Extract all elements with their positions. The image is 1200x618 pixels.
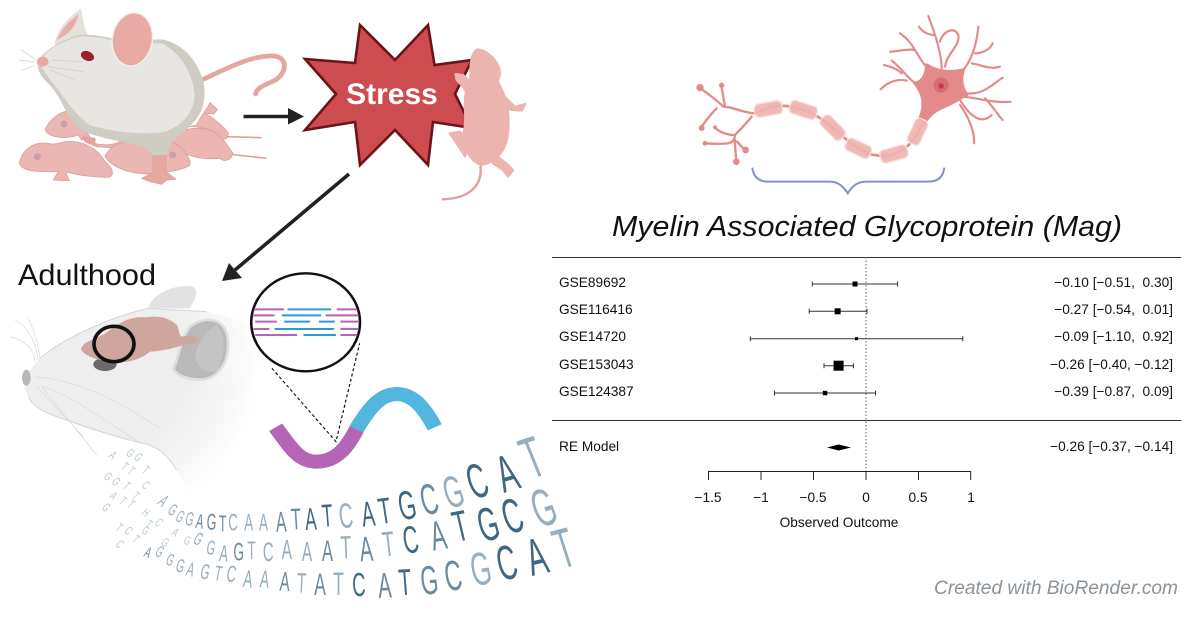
sequence row 3: C [441,552,465,601]
sequence row 3: G [466,543,496,597]
effect size squares [823,282,858,395]
sequence row 3: G [164,550,177,570]
sequence row 3: T [212,561,225,586]
study labels: GSE153043 [559,357,634,372]
sequence row 2: C [400,518,422,562]
pup limbs [450,74,525,177]
effect values: −0.09 [−1.10, 0.92] [1054,329,1173,344]
sequence row 3: A [519,526,554,587]
axis title: Observed Outcome [780,515,898,530]
sequence row 2: G [190,530,206,550]
scattered letters: A [106,450,119,462]
credit: Created with BioRender.com [934,578,1178,599]
sequence row 1: C [415,475,443,525]
scattered letters: C [152,517,165,530]
x axis [708,472,971,480]
scattered letters: T [112,522,125,535]
sequence row 1: G [183,509,196,531]
axis tick labels: −1 [753,490,769,505]
scattered letters [99,447,192,552]
sequence row 2: C [495,488,530,545]
sequence row 2: A [302,536,313,567]
sequence row 1: A [244,510,253,537]
effect values: −0.26 [−0.37, −0.14] [1050,439,1173,454]
scattered letters: T [129,534,142,547]
scattered letters: T [124,465,137,478]
scattered letters: T [129,490,142,503]
sequence row 2: A [218,540,230,567]
sequence row 2 [190,477,565,570]
terminal bulbs [696,83,749,165]
sequence row 1: T [290,503,302,537]
forest plot [552,257,1181,530]
curved sequence letters [99,425,583,607]
sequence row 3: T [296,568,307,599]
sequence row 2: T [340,531,352,566]
left ear [54,8,88,45]
scattered letters: T [118,461,131,474]
nucleus [933,77,949,93]
study labels: RE Model [559,439,619,454]
sequence row 3: A [377,567,393,607]
sequence row 3: T [333,568,344,602]
study labels: GSE124387 [559,384,634,399]
sequence row 3: G [152,542,167,561]
study labels: GSE14720 [559,329,626,344]
scattered letters: G [123,447,136,461]
pup body [463,49,509,165]
scattered letters: G [100,471,114,484]
sequence row 2: A [282,535,293,565]
reads [250,309,363,335]
region circle [94,326,134,362]
axis tick labels: −0.5 [799,490,827,505]
body highlight [40,36,195,133]
scattered letters: C [138,479,152,493]
sequence row 3 [141,516,583,607]
starburst: stress [305,25,472,165]
whiskers [10,317,160,455]
effect values [1050,275,1173,454]
sequence row 2: G [471,497,505,553]
sequence row 2: T [448,502,473,552]
scattered letters: H [138,507,152,520]
sequence row 3: G [173,556,187,578]
sequence row 1: G [437,465,470,518]
sequence row 1 [153,425,554,538]
RNA ribbon [276,394,435,462]
sequence row 2: A [322,535,334,568]
dendrites and soma [881,16,1011,143]
sequence row 2: C [263,536,274,567]
effect values: −0.27 [−0.54, 0.01] [1054,302,1173,317]
axis tick labels: 0.5 [908,490,928,505]
rear ear [173,320,228,379]
sequence row 1: A [359,495,377,535]
sequence row 2: T [247,538,256,565]
effect values: −0.26 [−0.40, −0.12] [1050,357,1173,372]
sequence row 1: G [206,508,217,535]
inner ear fold [195,325,224,372]
nose [22,370,31,386]
eye [79,49,96,63]
table rules [552,258,1181,420]
axis tick labels [694,490,975,505]
sequence row 1: A [153,492,172,511]
nucleolus [938,83,944,89]
sequence row 3: A [242,566,254,594]
sequence row 1: A [194,510,206,534]
scattered letters: G [158,536,171,550]
sequence row 1: C [459,453,495,510]
study labels [559,275,634,454]
sequence row 3: T [397,563,413,604]
sequence row 1: T [219,510,227,536]
lens circle [251,273,360,371]
sequence row 2: A [427,513,451,560]
summary diamond [827,444,851,450]
illustration: mother mouse with pups [19,8,284,184]
scattered letters: C [121,525,135,538]
effect values: −0.10 [−0.51, 0.30] [1054,275,1173,290]
sequence row 1: A [488,443,526,503]
scattered letters: T [139,464,152,477]
sequence row 1: T [376,491,394,533]
head outline [28,308,207,470]
scattered letters: G [109,476,122,489]
label: stress: Stress [346,78,438,111]
scattered letters: G [99,502,112,515]
brain [81,317,200,362]
sequence row 2: G [205,537,217,560]
scattered letters: T [119,480,133,493]
pup tail [443,167,481,199]
sequence row 1: T [511,425,554,492]
sequence row 1: C [337,496,355,537]
sequence row 1: A [304,502,318,538]
head silhouette [23,308,283,493]
right ear [109,10,156,68]
scattered letters: G [181,535,192,549]
whiskers [19,49,83,80]
effect values: −0.39 [−0.87, 0.09] [1054,384,1173,399]
scattered letters: G [139,525,151,539]
sequence row 1: C [228,510,238,537]
sequence row 2: T [380,525,397,565]
scattered letters: T [142,519,155,532]
pups [19,103,267,184]
sequence row 2: G [233,540,244,567]
sequence row 3: C [491,535,523,592]
mouse tail [203,56,284,94]
sequence row 3: G [418,556,441,604]
heading: adulthood: Adulthood [18,259,156,292]
sequence row 3: A [279,566,291,597]
sequence row 1: A [259,510,268,537]
sequence row 1: T [321,499,334,534]
sequence row 2: A [358,530,374,570]
study labels: GSE89692 [559,275,626,290]
study labels: GSE116416 [559,302,633,317]
bracket under axon [752,168,944,193]
scattered letters: G [131,451,145,465]
sequence row 3: C [352,566,366,604]
scattered letters: A [168,527,181,540]
sequence row 3: A [141,544,155,562]
scattered letters: T [116,495,129,508]
nose [37,57,49,67]
title: Myelin Associated Glycoprotein (Mag) [612,211,1122,243]
illustration: neuron with myelin sheaths [696,16,1011,193]
lens callout with sequencing reads [250,273,363,442]
axon and myelin [696,83,944,193]
sequence row 1: G [173,507,188,526]
zero reference line [865,257,867,471]
sequence row 3: A [314,568,326,602]
eye [93,358,117,371]
sequence row 3: A [259,566,271,594]
dashed zoom lines [272,343,360,442]
sequence row 3: T [546,516,583,581]
scattered letters: C [112,538,126,552]
mouse body [37,35,205,155]
myelin sheaths [753,99,929,164]
sequence row 3: C [225,562,238,588]
scattered letters: A [106,490,119,503]
top ear [148,286,196,308]
confidence intervals [750,282,963,396]
axis tick labels: 0 [862,490,870,505]
illustration: isolated pup [443,49,525,199]
sequence row 1: G [165,500,181,519]
axis tick labels: 1 [967,490,975,505]
scattered letters: T [124,499,137,512]
sequence row 2: G [523,477,565,540]
axis tick labels: −1.5 [694,490,722,505]
sequence row 1: A [275,505,287,538]
arrow: mother to stress [244,108,304,124]
sequence row 1: G [394,481,420,529]
sequence row 3: G [198,559,213,585]
sequence row 3: A [184,558,197,582]
arrow: stress to adulthood [222,174,349,281]
illustration: adult mouse head with brain [10,286,283,493]
